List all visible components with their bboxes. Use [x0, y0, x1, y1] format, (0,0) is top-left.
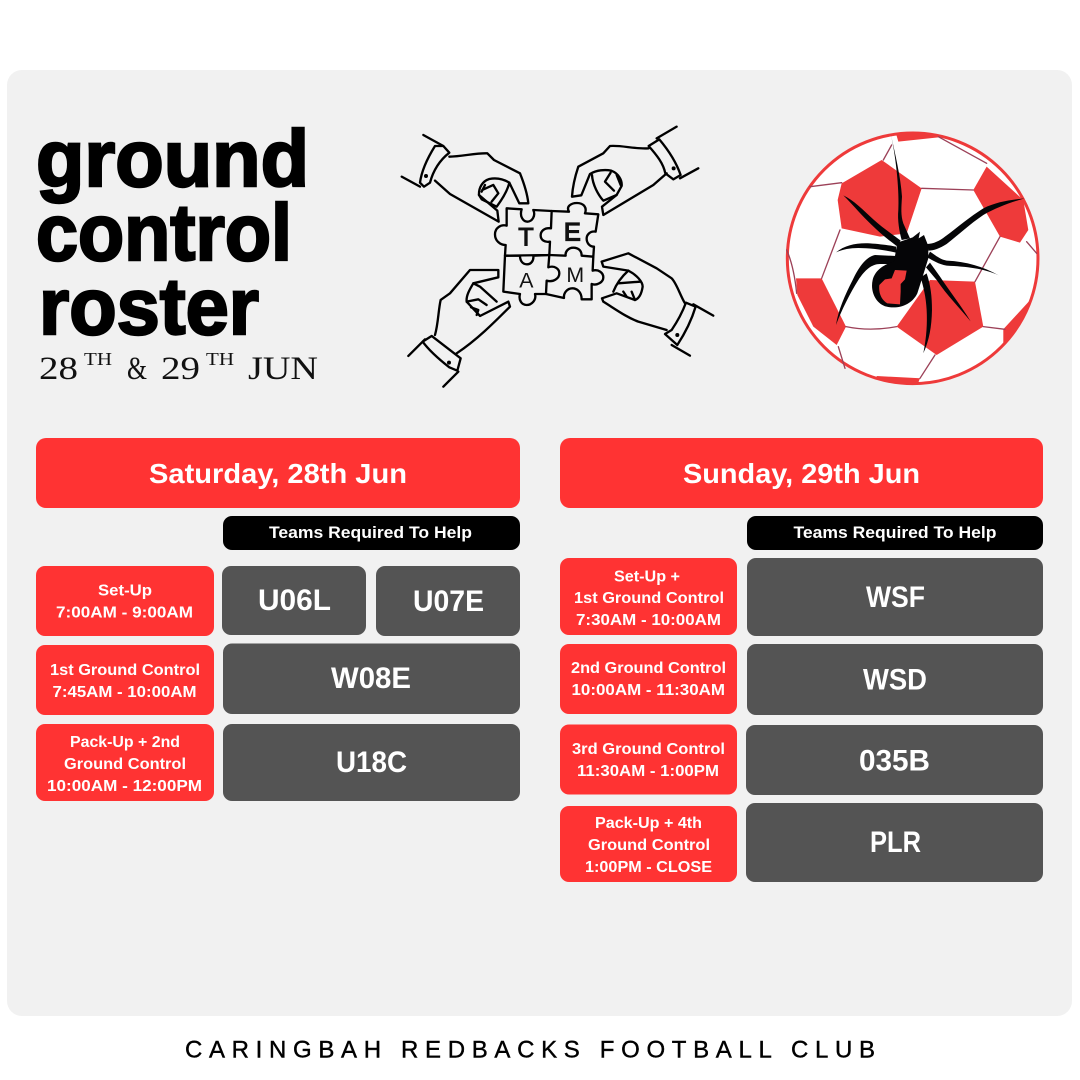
label: teams required, Sunday	[747, 516, 1043, 550]
slot: Set-Up Sunday: 1st Ground Control	[574, 590, 724, 607]
slot: Pack-Up Saturday: Ground Control	[64, 756, 186, 773]
title: control	[36, 188, 292, 277]
heading: Saturday: Saturday, 28th Jun	[149, 458, 407, 489]
slot: Set-Up Sunday: 7:30AM - 10:00AM	[576, 612, 721, 629]
team: U18C	[223, 724, 520, 801]
team: U06L	[222, 566, 366, 635]
team: W08E: W08E	[331, 662, 411, 695]
slot: 1st Ground Control Saturday: 7:45AM - 10:00AM	[52, 684, 196, 701]
team: 035B: 035B	[859, 744, 930, 778]
puzzle letters: E	[564, 219, 581, 247]
slot: 1st Ground Control Saturday: 1st Ground Control	[50, 662, 200, 679]
icon: hands assembling team puzzle	[402, 127, 713, 387]
team: WSF: WSF	[866, 581, 925, 614]
heading: Sunday: Sunday, 29th Jun	[683, 458, 920, 489]
slot: Pack-Up Saturday: Pack-Up + 2nd	[70, 734, 180, 751]
date subtitle: 28	[39, 351, 78, 387]
panel: Saturday schedule	[36, 438, 520, 801]
slot: Set-Up Saturday: 7:00AM - 9:00AM	[56, 604, 193, 622]
ball outline	[787, 133, 1038, 384]
team: U07E	[376, 566, 520, 636]
slot: Set-Up Saturday: Set-Up	[98, 582, 152, 600]
slot: Set-Up Sunday: Set-Up +	[614, 568, 680, 586]
slot: 1st Ground Control Saturday	[36, 645, 214, 715]
team: U18C: U18C	[336, 746, 407, 779]
team: WSD: WSD	[863, 664, 927, 696]
slot: 3rd Ground Control: 3rd Ground Control	[572, 741, 725, 758]
title: ground	[36, 114, 309, 203]
team: U07E: U07E	[413, 585, 484, 618]
slot: Pack-Up Sunday: 1:00PM - CLOSE	[585, 859, 712, 876]
ball seams	[787, 137, 1037, 378]
team: PLR: PLR	[870, 826, 921, 859]
label: teams required, Saturday	[223, 516, 520, 550]
slot: Pack-Up Sunday: Pack-Up + 4th	[595, 815, 702, 832]
puzzle letters: M	[566, 263, 584, 287]
label: teams required, Saturday: Teams Required To Help	[269, 523, 472, 542]
slot: Set-Up Saturday	[36, 566, 214, 636]
heading: Sunday	[560, 438, 1043, 508]
title	[36, 114, 309, 351]
date subtitle: 29	[161, 351, 200, 387]
ball base	[787, 133, 1038, 384]
slot: 2nd Ground Control: 10:00AM - 11:30AM	[572, 682, 725, 699]
puzzle letters	[518, 219, 584, 292]
slot: 2nd Ground Control: 2nd Ground Control	[571, 660, 726, 677]
team: WSF	[747, 558, 1043, 636]
puzzle letters: A	[519, 268, 534, 292]
slot: 3rd Ground Control	[560, 724, 737, 794]
title: roster	[39, 262, 259, 351]
team: 035B	[746, 725, 1043, 795]
date subtitle: JUN	[248, 351, 318, 387]
team: WSD	[747, 644, 1043, 715]
footer: club name: CARINGBAH REDBACKS FOOTBALL CLUB	[185, 1036, 875, 1064]
date subtitle: TH	[84, 349, 112, 369]
slot: Pack-Up Saturday: 10:00AM - 12:00PM	[47, 778, 202, 795]
hand: bottom right	[602, 253, 713, 356]
hand: top right	[572, 127, 698, 215]
team: PLR	[746, 803, 1043, 882]
slot: 2nd Ground Control	[560, 644, 737, 714]
team: W08E	[223, 644, 520, 714]
slot: 3rd Ground Control: 11:30AM - 1:00PM	[577, 763, 719, 780]
date subtitle	[39, 349, 318, 387]
hand: top left	[402, 135, 528, 222]
slot: Pack-Up Sunday: Ground Control	[588, 837, 710, 854]
spider	[836, 133, 1025, 353]
icon: soccer ball with redback spider	[780, 130, 1038, 387]
hand: bottom left	[408, 270, 510, 387]
date subtitle: &	[127, 351, 147, 387]
panel: Sunday schedule	[560, 438, 1043, 882]
slot: Set-Up Sunday	[560, 558, 737, 635]
heading: Saturday	[36, 438, 520, 508]
slot: Pack-Up Saturday	[36, 724, 214, 801]
ball red panels	[796, 134, 1029, 382]
team: U06L: U06L	[258, 584, 331, 617]
date subtitle: TH	[206, 349, 234, 369]
spider red hourglass	[879, 270, 907, 304]
puzzle pieces	[495, 203, 603, 305]
label: teams required, Sunday: Teams Required To Help	[794, 523, 996, 542]
slot: Pack-Up Sunday	[560, 806, 737, 882]
puzzle letters: T	[518, 224, 534, 252]
